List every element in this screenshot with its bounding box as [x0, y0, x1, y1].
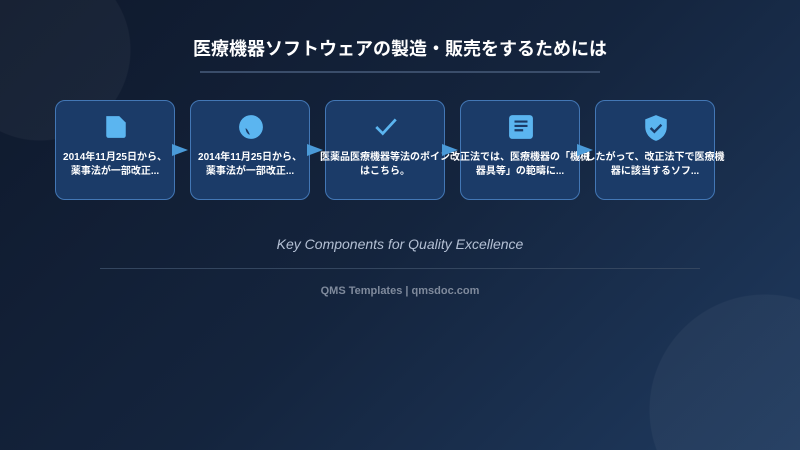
card 3: 医薬品医療機器等法のポイン: [320, 152, 450, 163]
icon: globe: [239, 115, 263, 139]
arrow 4: [577, 144, 593, 156]
card 5: [595, 100, 715, 200]
card 1: 2014年11月25日から、: [63, 152, 167, 163]
card 4: 改正法では、医療機器の「機械: [450, 152, 590, 163]
card 4: [460, 100, 580, 200]
card 3: [325, 100, 445, 200]
subtitle: Key Components for Quality Excellence: [277, 236, 523, 252]
arrow 2: [307, 144, 323, 156]
arrow 3: [442, 144, 458, 156]
icon: check: [375, 118, 397, 136]
card 5: したがって、改正法下で医療機: [586, 152, 724, 163]
card 2: 2014年11月25日から、: [198, 152, 302, 163]
icon: document: [106, 116, 126, 138]
card 5: 器に該当するソフ...: [611, 166, 699, 177]
arrow 1: [172, 144, 188, 156]
footer: QMS Templates | qmsdoc.com: [321, 285, 479, 297]
card 2: 薬事法が一部改正...: [206, 166, 294, 177]
card 4: 器具等」の範疇に...: [476, 166, 564, 177]
card 1: [55, 100, 175, 200]
title: 医療機器ソフトウェアの製造・販売をするためには: [193, 39, 607, 59]
card 3: はこちら。: [360, 166, 410, 177]
card 1: 薬事法が一部改正...: [71, 166, 159, 177]
icon: text note: [509, 115, 533, 139]
card 2: [190, 100, 310, 200]
icon: shield: [645, 115, 667, 141]
